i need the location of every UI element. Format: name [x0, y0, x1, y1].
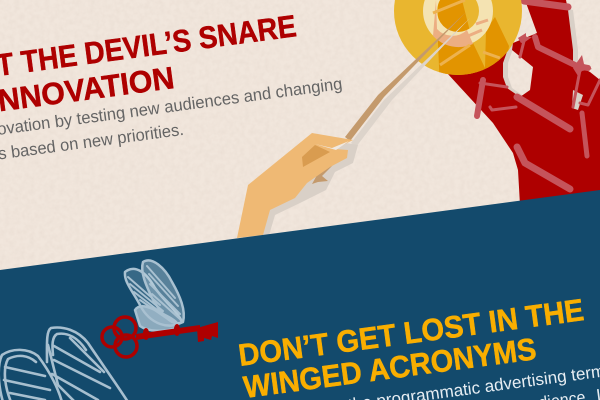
text block: innovation body: s based on new priorities.	[0, 120, 185, 163]
vine thorns	[518, 33, 592, 76]
heading: devil's snare	[0, 8, 298, 119]
panel: blue section	[0, 190, 600, 400]
vine strands	[477, 1, 600, 189]
heading: winged acronyms: DON’T GET LOST IN THE	[236, 292, 586, 373]
illustration: wand and conductor's hand	[237, 12, 470, 242]
illustration: devil's snare hand	[438, 0, 600, 205]
illustration: glowing spell circle	[394, 0, 522, 75]
illustration: large wings	[0, 328, 128, 400]
heading: devil's snare: T THE DEVIL’S SNARE	[0, 8, 298, 83]
hand	[237, 133, 353, 238]
wand	[345, 12, 466, 141]
icon: red key	[102, 317, 218, 357]
illustration: small wings	[125, 260, 184, 331]
text block: innovation body: ovation by testing new audiences and changing	[0, 74, 343, 139]
